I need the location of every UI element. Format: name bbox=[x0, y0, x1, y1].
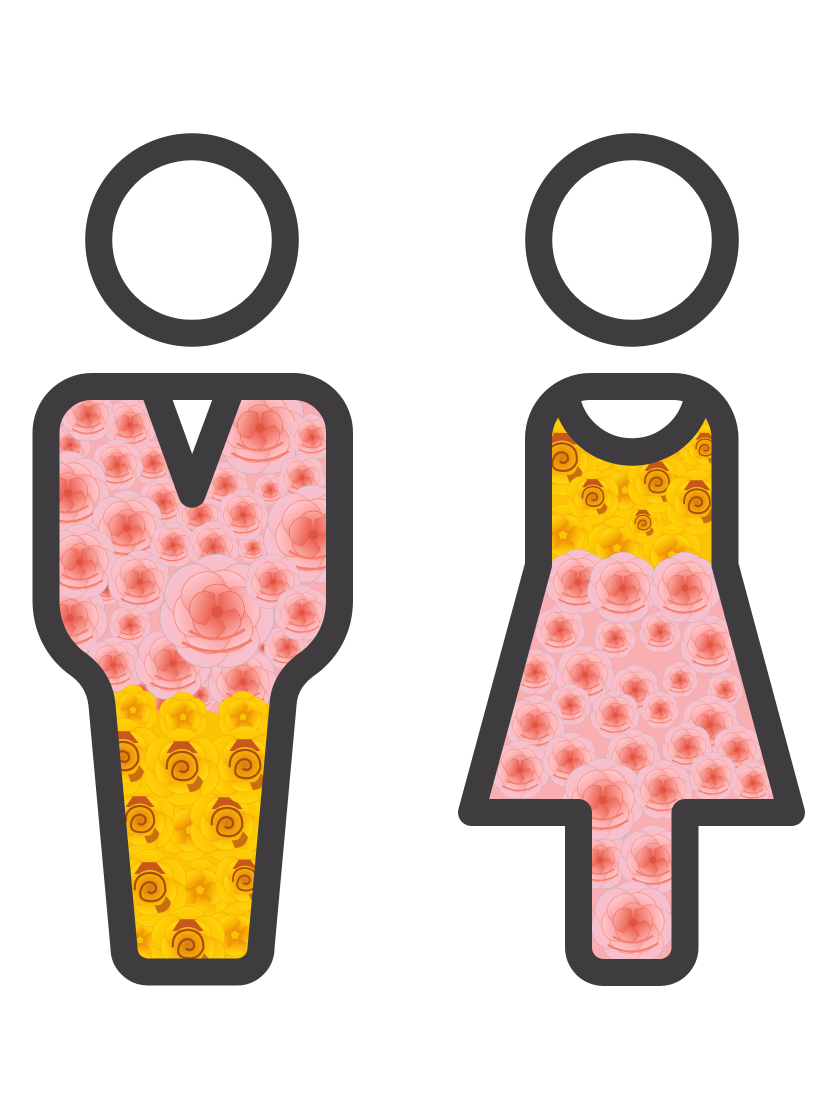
pink roses on man torso bbox=[60, 400, 326, 712]
yellow roses on man legs bbox=[114, 684, 270, 958]
figure: woman bbox=[460, 147, 800, 980]
man collar opening bbox=[153, 386, 232, 494]
man collar V bbox=[153, 386, 232, 494]
yellow roses on woman bodice bbox=[552, 418, 712, 570]
pink roses on woman skirt and legs bbox=[487, 549, 777, 970]
man body outline bbox=[46, 386, 340, 972]
woman head ring bbox=[539, 147, 725, 333]
man head ring bbox=[99, 147, 285, 333]
woman neck opening bbox=[566, 395, 698, 452]
woman dress rose fill bbox=[489, 418, 774, 959]
man body rose fill bbox=[60, 400, 326, 958]
woman dress outline bbox=[472, 386, 792, 972]
woman neckline bbox=[566, 395, 698, 452]
figure: man bbox=[22, 147, 367, 984]
